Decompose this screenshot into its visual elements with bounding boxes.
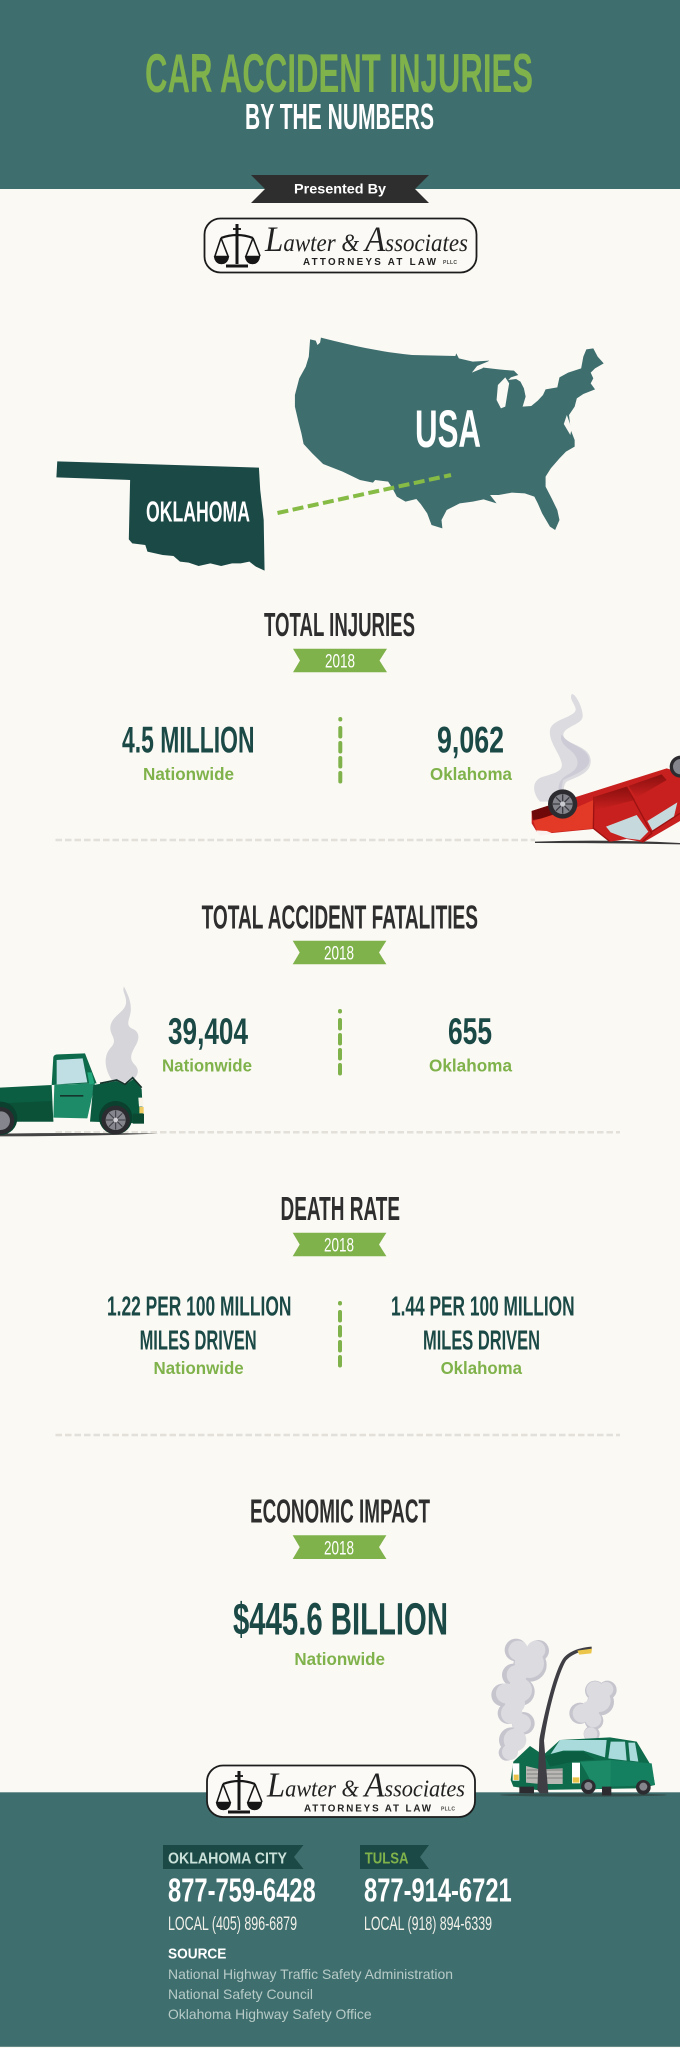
stat: nationwide bbox=[162, 1010, 252, 1076]
header band bbox=[0, 0, 680, 189]
contact: Tulsa bbox=[360, 1845, 512, 1935]
stat: nationwide: Nationwide bbox=[143, 764, 234, 784]
logo: Lawter & Associates (top) bbox=[204, 218, 476, 272]
phone: 877-914-6721 bbox=[364, 1872, 512, 1909]
logo: Lawter & Associates (bottom) bbox=[207, 1766, 475, 1817]
section: economic impact bbox=[233, 1493, 448, 1669]
heading: TOTAL INJURIES bbox=[264, 606, 415, 643]
year ribbon: 2018 bbox=[325, 652, 355, 673]
year ribbon: 2018 bbox=[324, 943, 354, 964]
city ribbon: TULSA bbox=[365, 1850, 408, 1867]
map: USA: USA bbox=[415, 400, 481, 459]
local phone: LOCAL (918) 894-6339 bbox=[364, 1914, 492, 1935]
year ribbon: 2018 bbox=[324, 1538, 354, 1559]
stat: Oklahoma: Oklahoma bbox=[441, 1358, 522, 1378]
stat: Oklahoma: MILES DRIVEN bbox=[423, 1324, 540, 1355]
map: Oklahoma bbox=[56, 461, 265, 571]
smoke right bbox=[569, 1681, 617, 1753]
year ribbon bbox=[293, 649, 387, 673]
map: USA bbox=[295, 338, 604, 530]
stat: Oklahoma: Oklahoma bbox=[429, 1056, 512, 1076]
footer band bbox=[0, 1792, 680, 2047]
section: total injuries bbox=[122, 606, 512, 784]
city ribbon bbox=[360, 1845, 429, 1869]
lamp post bbox=[537, 1647, 592, 1793]
icon: overturned red car with smoke bbox=[532, 694, 680, 844]
source list bbox=[168, 1945, 453, 2022]
stat: Oklahoma bbox=[430, 718, 512, 784]
stat: nationwide: 39,404 bbox=[168, 1010, 248, 1052]
stat: nationwide: Nationwide bbox=[162, 1056, 252, 1076]
local phone: LOCAL (405) 896-6879 bbox=[168, 1914, 297, 1935]
logo: Lawter & Associates (top): PLLC bbox=[443, 260, 457, 266]
stat: nationwide: 4.5 MILLION bbox=[122, 718, 254, 760]
stat: Oklahoma: 1.44 PER 100 MILLION bbox=[391, 1291, 575, 1322]
year ribbon bbox=[293, 941, 386, 964]
stat: nationwide bbox=[107, 1291, 291, 1378]
source list: National Safety Council bbox=[168, 1986, 313, 2002]
stat: nationwide: Nationwide bbox=[154, 1358, 244, 1378]
arrow: dashed line from Oklahoma to USA bbox=[278, 475, 451, 513]
year ribbon bbox=[293, 1535, 386, 1559]
icon: green car crashed into lamp post with smoke bbox=[491, 1639, 667, 1797]
stat: Oklahoma: Oklahoma bbox=[430, 764, 512, 784]
presented by ribbon bbox=[251, 175, 429, 203]
heading: TOTAL ACCIDENT FATALITIES bbox=[202, 898, 478, 935]
presented by ribbon: Presented By bbox=[294, 181, 386, 197]
heading: ECONOMIC IMPACT bbox=[250, 1493, 430, 1530]
stat: Oklahoma bbox=[429, 1010, 512, 1076]
section: death rate bbox=[107, 1190, 575, 1378]
stat: Oklahoma bbox=[391, 1291, 575, 1378]
heading: DEATH RATE bbox=[280, 1190, 400, 1227]
stat: nationwide: 1.22 PER 100 MILLION bbox=[107, 1291, 291, 1322]
stat: nationwide bbox=[122, 718, 254, 784]
city ribbon bbox=[163, 1845, 304, 1869]
stat: nationwide: MILES DRIVEN bbox=[140, 1324, 257, 1355]
phone: 877-759-6428 bbox=[168, 1872, 316, 1909]
year ribbon: 2018 bbox=[324, 1236, 354, 1257]
year ribbon bbox=[293, 1233, 386, 1257]
contact: Oklahoma City bbox=[163, 1845, 316, 1935]
stat: nationwide bbox=[233, 1593, 448, 1669]
logo: Lawter & Associates (bottom): PLLC bbox=[441, 1806, 455, 1812]
smoke left bbox=[491, 1639, 549, 1761]
map: Oklahoma: OKLAHOMA bbox=[146, 497, 250, 529]
logo: Lawter & Associates (top): Lawter & Associates bbox=[264, 219, 468, 259]
city ribbon: OKLAHOMA CITY bbox=[168, 1850, 288, 1867]
logo: Lawter & Associates (bottom): Lawter & Associates bbox=[266, 1766, 465, 1805]
icon: green pickup truck with smoke bbox=[0, 987, 158, 1136]
stat: Oklahoma: 9,062 bbox=[437, 718, 504, 760]
stat: nationwide: $445.6 BILLION bbox=[233, 1593, 448, 1644]
section: total accident fatalities bbox=[162, 898, 512, 1076]
subtitle: BY THE NUMBERS bbox=[245, 96, 434, 137]
icon: scales of justice bbox=[214, 224, 260, 266]
icon: scales of justice bbox=[216, 1771, 262, 1812]
source list: National Highway Traffic Safety Administration bbox=[168, 1966, 453, 1982]
source list: SOURCE bbox=[168, 1945, 226, 1962]
logo: Lawter & Associates (bottom): ATTORNEYS AT LAW bbox=[304, 1804, 432, 1814]
stat: nationwide: Nationwide bbox=[294, 1649, 385, 1669]
source list: Oklahoma Highway Safety Office bbox=[168, 2006, 372, 2022]
stat: Oklahoma: 655 bbox=[448, 1010, 492, 1052]
logo: Lawter & Associates (top): ATTORNEYS AT LAW bbox=[303, 257, 437, 268]
